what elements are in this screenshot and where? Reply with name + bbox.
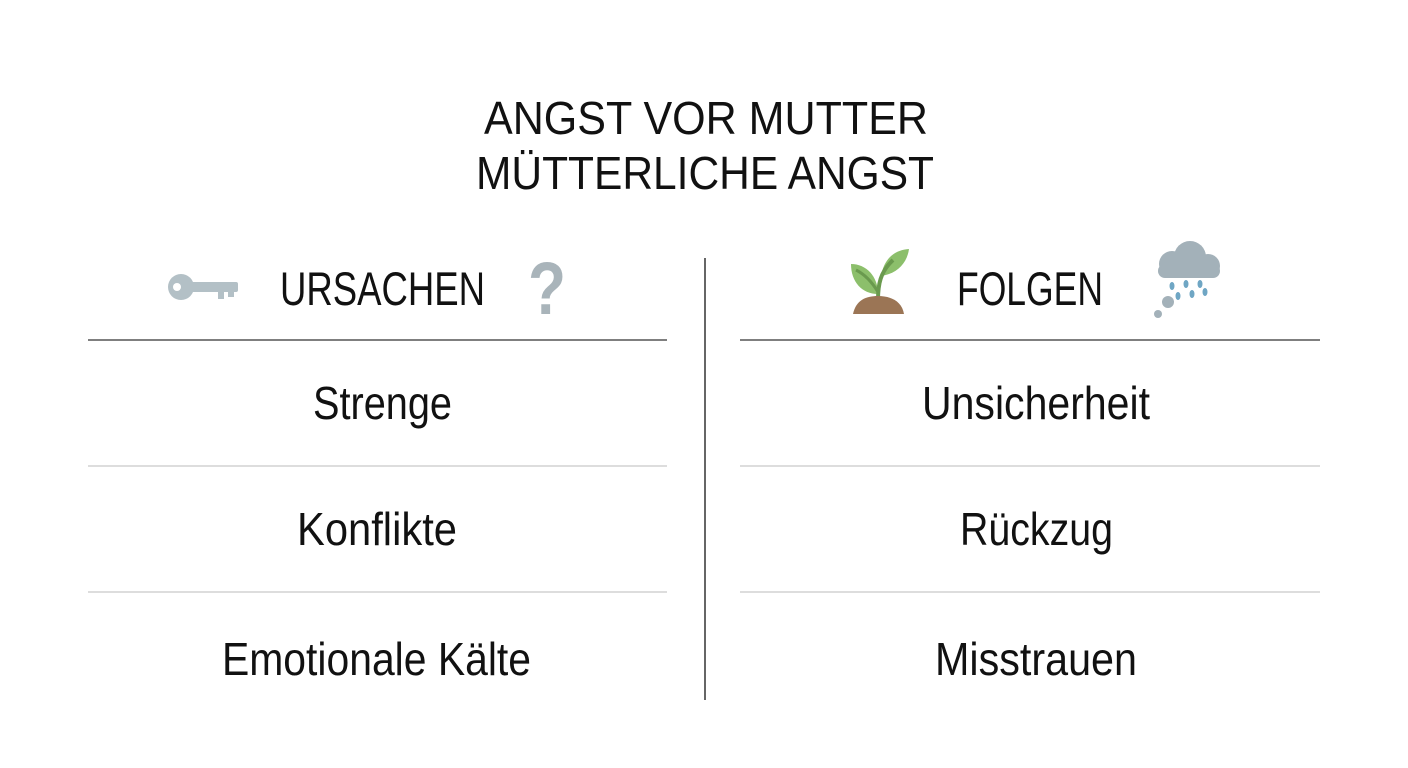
heading: FOLGEN: FOLGEN	[957, 262, 1103, 315]
panel: causes	[88, 247, 667, 685]
vertical divider	[704, 258, 706, 700]
icon: sprout	[851, 249, 909, 314]
title: MÜTTERLICHE ANGST	[476, 147, 934, 199]
item: Rückzug: Rückzug	[960, 503, 1113, 555]
icon: rain cloud	[1154, 241, 1220, 318]
title: ANGST VOR MUTTER	[484, 92, 928, 144]
item: Strenge: Strenge	[313, 377, 452, 429]
item: Konflikte: Konflikte	[297, 503, 457, 555]
item: Emotionale Kälte: Emotionale Kälte	[222, 633, 531, 685]
title	[476, 92, 934, 199]
heading: URSACHEN: URSACHEN	[280, 262, 485, 315]
item: Unsicherheit: Unsicherheit	[922, 377, 1150, 429]
icon: question mark: ?	[528, 247, 566, 330]
icon: key	[168, 274, 238, 300]
item: Misstrauen: Misstrauen	[935, 633, 1137, 685]
panel: consequences	[740, 241, 1320, 685]
